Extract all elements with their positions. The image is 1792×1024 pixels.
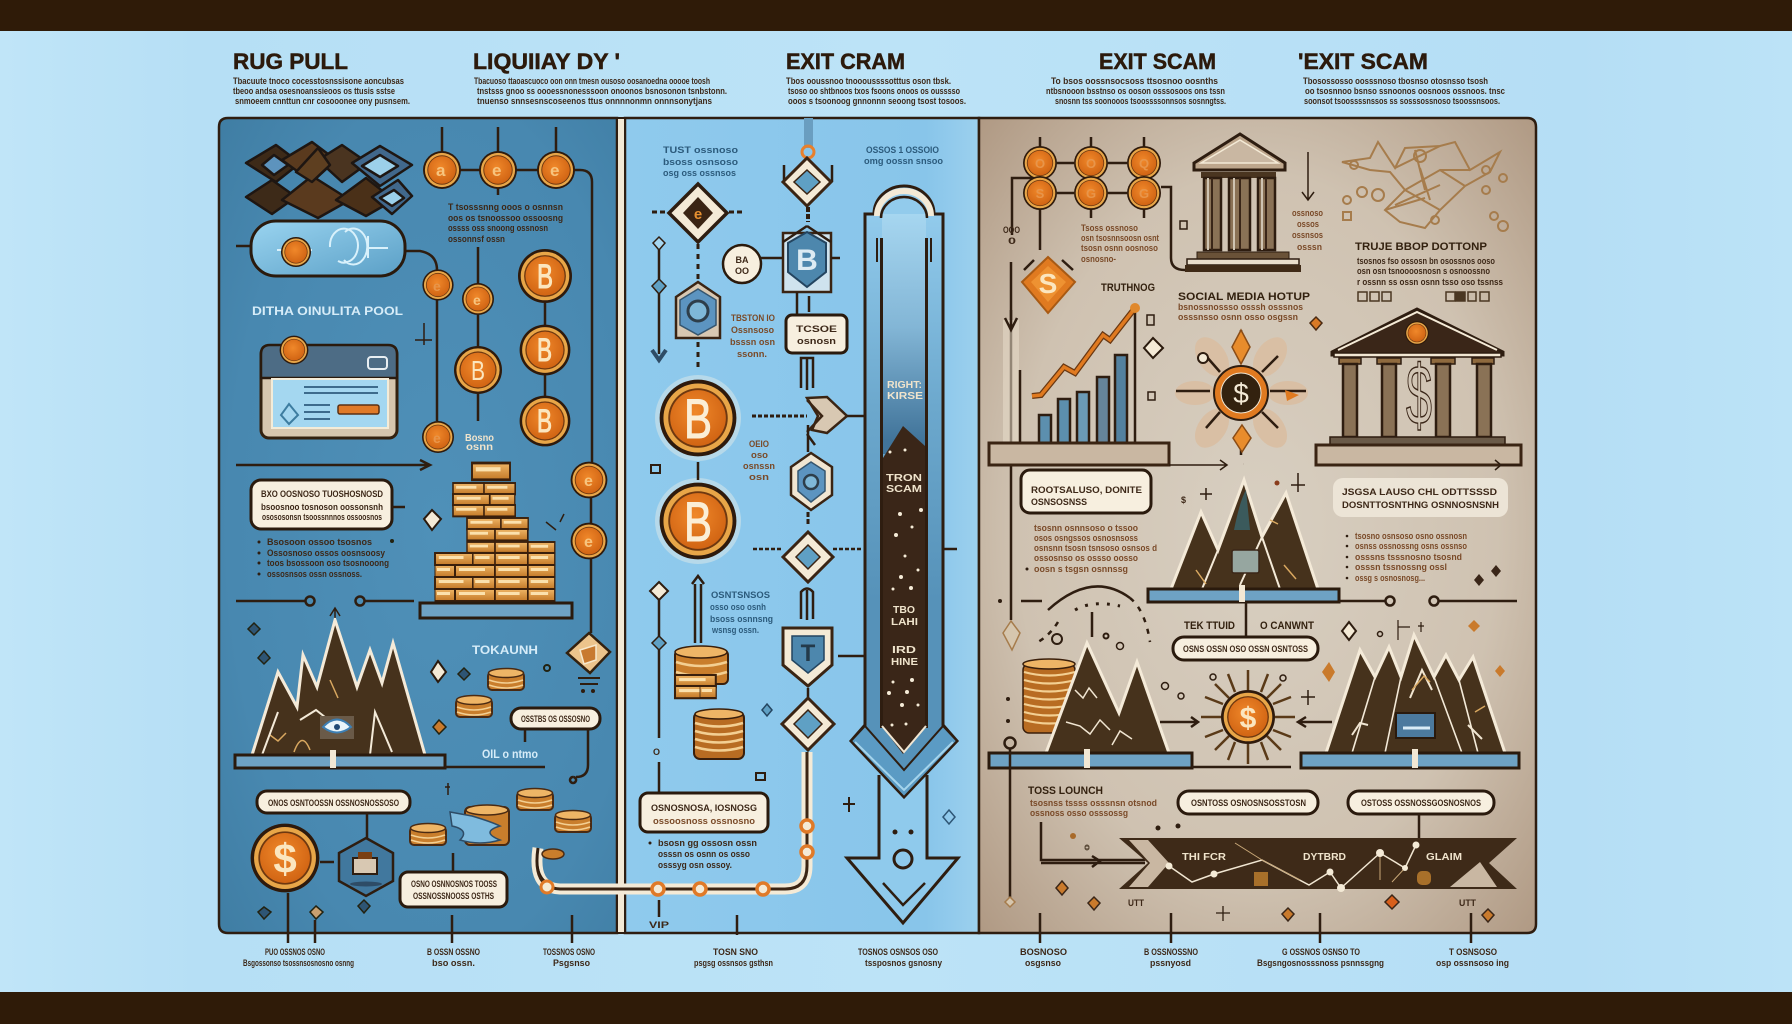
icon: left diamond [652, 184, 745, 242]
callout: right soft box [1333, 478, 1508, 517]
icon: left timeline lower [650, 582, 668, 792]
icon: B shield: B [796, 244, 818, 277]
footer captions: psgsg ossnsos gsthsn [694, 958, 773, 968]
icon: six coins: O [1086, 156, 1096, 171]
small marks [756, 704, 955, 824]
small diamonds [248, 510, 564, 919]
header: exit scam: snosnn tss soonooos tsoossssonnsos sosnngtss. [1055, 96, 1226, 106]
chart: big down arrow: HINE [891, 657, 918, 668]
text block: bullet list [258, 537, 389, 579]
chart: big down arrow [847, 186, 958, 923]
text: center note: bsssn osn [730, 337, 775, 347]
chart: big down arrow: SCAM [886, 484, 922, 495]
footer captions: Bsgossonso tsossnsosnosno osnng [243, 958, 354, 968]
text: temple note: ossnoso [1292, 208, 1323, 218]
icon: temple large [1316, 309, 1521, 465]
top connector [804, 118, 813, 148]
small marks upper [1181, 473, 1305, 505]
icon: left timeline [652, 237, 666, 360]
icon: hexagon 2 [791, 453, 832, 510]
callout: two line note: OSNO OSNNOSNOS TOOSS [411, 879, 497, 889]
header: rug pull: snmoeem cnnttun cnr cosooonee ony pusnsem. [235, 96, 410, 106]
callout: center box [786, 315, 847, 353]
chart: big down arrow: RIGHT: [887, 380, 922, 391]
icon: shield badge [676, 282, 720, 338]
small diamonds lower [1056, 824, 1494, 922]
icon: labeled circle [723, 245, 783, 283]
icon: bitcoin column: B [537, 403, 552, 439]
heading: panel note title: TRUJE BBOP DOTTONP [1355, 241, 1487, 253]
icon: browser window [261, 336, 397, 438]
text: blue note lower: wsnsg ossn. [711, 625, 759, 635]
coin line connections [236, 127, 592, 633]
text block: bullet list: ossosnsos ossn ossnoss. [267, 569, 362, 579]
icon: labeled circle: OO [735, 266, 749, 276]
icon: diamond 3 [753, 532, 863, 582]
text block: top note: oos os tsnoossoo ossoosng [448, 213, 563, 223]
text: small coin caption: Bosno [465, 433, 494, 444]
footer captions: B OSSNOSSNO [1144, 947, 1198, 957]
text: between coins note: osnssn [743, 461, 775, 471]
header: exit scam: ntbsnooon bsstnso os ooson osssosoos ons tssn [1046, 86, 1225, 96]
icon: arrow tag [807, 397, 865, 452]
arrows: base flow [1169, 460, 1521, 470]
text: left tiny label [1003, 225, 1020, 246]
text block: top note: ossss oss snoong ossnosn [448, 223, 548, 233]
connectors: coin and hexagon [320, 813, 367, 862]
text: lower bullets: osssn os osnn os osso [658, 849, 750, 859]
text: right bullets: osssns tsssnosno tsosnd [1355, 552, 1462, 562]
labels: UTT marks: UTT [1128, 898, 1144, 908]
text: top left note: osg oss ossnsos [663, 168, 736, 178]
panel: rug pull background [219, 118, 617, 933]
text: coin note [1081, 223, 1159, 264]
icon: tube [801, 358, 813, 390]
label: token launch: TOSS LOUNCH [1028, 785, 1103, 797]
arrow: up to coin [692, 576, 704, 643]
text: small coin caption [465, 433, 494, 453]
text: blue note lower: bsoss osnnsng [710, 614, 773, 624]
heading: token label: TOKAUNH [472, 643, 538, 657]
callout: right soft box: JSGSA LAUSO CHL ODTTSSSD [1342, 487, 1498, 497]
icon: mountains [235, 608, 445, 768]
icon: left diamond: e [694, 206, 702, 223]
footer captions: TOSNOS OSNSOS OSO [858, 947, 938, 957]
callout: bottom pills: OSTOSS OSSNOSSGOSNOSNOS [1361, 798, 1481, 808]
text: coin note: Tsoss ossnoso [1081, 223, 1138, 233]
arrow: pool to bricks [236, 460, 430, 470]
heading: oil label: OIL o ntmo [482, 747, 538, 761]
callout: long pill [257, 791, 410, 813]
icon: six coins: O [1035, 156, 1045, 171]
icon: six coins: G [1086, 186, 1096, 201]
text block: bullet list: Ossosnoso ossos oosnsoosy [267, 548, 385, 558]
icon: right column coins: e [584, 534, 593, 551]
callout: left cream box: OSNSOSNSS [1031, 497, 1087, 507]
chart: big down arrow: KIRSE [887, 391, 923, 402]
chart: bars and trend [989, 303, 1169, 465]
text: temple note: ossnsos [1292, 230, 1323, 240]
top band [0, 0, 1792, 31]
header: exit cram: tsoso oo shtbnoos txos fsoons onoos os ousssso [788, 86, 960, 96]
header: exit scam two [1298, 49, 1505, 106]
icon: bitcoin column [518, 249, 572, 446]
header: liquidity: tnuenso snnsesnscoseenos ttus onnnnonmn onnnsonytjans [477, 96, 712, 106]
icon: dome and dots [1038, 586, 1150, 650]
text block: top note [448, 202, 563, 244]
text: left bullets: ossosnso os ossso oosso [1034, 553, 1138, 563]
icon: six coins [1023, 146, 1161, 210]
header: exit cram: ooos s tsoonoog gnnonnn seoong tsost tosoos. [788, 96, 966, 106]
timeline connector [236, 596, 414, 606]
text: top left note [663, 145, 739, 178]
text: social media note: SOCIAL MEDIA HOTUP [1178, 291, 1310, 303]
icon: dollar shield: S [1039, 268, 1057, 299]
panel: exit scam contents [989, 134, 1521, 922]
panel: liquidity contents [640, 118, 958, 935]
text: social media note: bsnossnossso osssh osssnos [1178, 302, 1303, 312]
header: liquidity: Tbacuoso ttaoascuoco oon onn tmesn ousoso oosanoedna ooooe toosh [474, 76, 710, 86]
bottom band [0, 992, 1792, 1024]
icon: bitcoin column: B [537, 258, 553, 296]
icon: shattered map [1342, 142, 1508, 231]
text: top right note: OSSOS 1 OSSOIO [866, 145, 939, 155]
icon: dollar shield [1022, 257, 1075, 313]
icon: small coins: e [433, 278, 441, 294]
text: VIP tag: VIP [649, 920, 669, 930]
footer captions: osgsnso [1025, 958, 1061, 968]
text: top right note [864, 145, 944, 166]
icon: tube 2 [801, 588, 813, 620]
icon: top coins: a [436, 161, 446, 180]
header: exit scam two: soonsot tsoossssnssos ss sosssossnoso tsoossnsoos. [1304, 96, 1500, 106]
header: exit scam: To bsos oossnsocsoss ttsosnoo oosnths [1051, 76, 1218, 86]
chart: big down arrow: LAHI [891, 617, 918, 628]
icon: dollar coin: $ [273, 835, 297, 882]
chart: big down arrow: TBO [893, 605, 915, 616]
text: title note: r ossnn ss ossn osnn tsso oso tssnss [1357, 277, 1503, 287]
text: token launch note [1030, 798, 1157, 818]
callout: bottom pills: OSNTOSS OSNOSNSOSSTOSN [1191, 798, 1306, 808]
icon: small square [651, 465, 660, 473]
icon: stack with bricks [675, 646, 728, 698]
text: lower bullets [648, 838, 757, 870]
text: lower bullets: bsosn gg ossosn ossn [658, 838, 757, 848]
icon: diamond 4 [782, 698, 834, 750]
footer captions: TOSSNOS OSNO [543, 947, 595, 957]
icon: six coins: Q [1139, 156, 1149, 171]
header: exit scam two: oo tsosnnoo bsnso ssnoonos oosnoos ossnoos. tnsc [1305, 86, 1505, 96]
callout: long pill: ONOS OSNTOOSSN OSSNOSNOSSOSO [268, 798, 399, 808]
marks around sun [998, 565, 1505, 723]
callout: center pill: OSNS OSSN OSO OSSN OSNTOSS [1183, 644, 1308, 654]
text: top left note: bsoss osnsoso [663, 157, 739, 167]
icon: diamond cart [567, 633, 610, 693]
icon: big bitcoin 2: B [684, 490, 712, 553]
text: right bullets [1346, 531, 1467, 583]
text: left bullets: osnsnn tsosn tsnsoso osnsos d [1034, 543, 1157, 553]
text block: top note: ossonnsf ossn [448, 234, 505, 244]
text: title note: tsosnos fso ossosn bn osossnos ooso [1357, 256, 1495, 266]
callout: rug pull mechanism [251, 480, 405, 529]
text: coin note: tsosn osnn oosnoso [1081, 243, 1158, 253]
arrow: down [1302, 152, 1314, 200]
small marks upper: $ [1181, 495, 1186, 505]
text block: top note: T tsosssnng ooos o osnnsn [448, 202, 563, 212]
header: exit cram: Tbos ooussnoo tnoooussssotttus oson tbsk. [786, 76, 951, 86]
text: left tiny label: OOO [1003, 225, 1020, 235]
text: social media note: osssnsso osnn osso osgssn [1178, 312, 1298, 322]
footer captions: pssnyosd [1150, 958, 1191, 968]
text: left tiny label: 0 [1008, 236, 1016, 246]
callout: left cream box [1021, 470, 1151, 513]
text: top left note: TUST ossnoso [663, 145, 739, 155]
text: blue note lower [710, 590, 773, 635]
icon: small coins: e [473, 292, 481, 308]
icon: gold brick stacks [420, 463, 572, 618]
text block: bullet list: Bsosoon ossoo tsosnos [267, 537, 372, 547]
footer captions: Bsgsngosnosssnoss psnnssgng [1257, 958, 1384, 968]
icon: big bitcoin 1 [655, 375, 741, 461]
text: center note: Ossnsoso [731, 325, 774, 335]
icon: tan small circle [1005, 897, 1015, 907]
icon: tan diamond [1003, 621, 1020, 650]
chart: big down arrow: IRD [892, 645, 916, 656]
text: social media note [1178, 291, 1310, 322]
label row: token launch: O CANWNT [1260, 620, 1314, 632]
icon: top diamond [783, 158, 832, 206]
icon: top coins: e [492, 161, 501, 180]
icon: T shield: T [801, 640, 816, 667]
text: small coin caption: osnn [466, 442, 493, 453]
chart: banner with line: DYTBRD [1303, 852, 1346, 863]
text: center note [730, 313, 775, 359]
labels: UTT marks: UTT [1459, 898, 1476, 908]
chart: banner with line: THI FCR [1182, 852, 1227, 863]
callout: rug pull mechanism: bsoosnoo tosnoson oossonsnh [261, 502, 383, 512]
icon: small coins [422, 269, 502, 453]
icon: diamond block cluster [246, 142, 412, 218]
icon: right column coins: e [584, 473, 593, 490]
footer captions: G OSSNOS OSNSO TO [1282, 947, 1360, 957]
icon: left mountains [989, 643, 1192, 768]
icon: right mountains [1301, 635, 1519, 768]
icon: right column coins [571, 462, 607, 559]
callout: lower box: ossoosnoss ossnosno [653, 816, 756, 826]
icon: big bitcoin 2 [655, 478, 741, 564]
icon: small coins: e [433, 430, 441, 446]
divider line [445, 766, 545, 768]
icon: labeled circle: BA [736, 255, 749, 265]
callout: lower box: OSNOSNOSA, IOSNOSG [651, 803, 757, 813]
text: blue note lower: OSNTSNSOS [711, 590, 770, 600]
header: exit cram: EXIT CRAM [786, 49, 905, 74]
icon: small coin stacks [456, 668, 524, 717]
callout: center pill [1173, 637, 1318, 660]
header: rug pull: RUG PULL [233, 49, 348, 74]
text: left bullets: osos osngssos osnosnsoss [1034, 533, 1138, 543]
text: temple note: osssn [1297, 242, 1322, 252]
label row: token launch: TEK TTUID [1184, 620, 1235, 632]
icon: big bitcoin 1: B [684, 387, 712, 450]
footer captions: BOSNOSO [1020, 947, 1067, 957]
icon: big stack [694, 709, 744, 759]
callout: two line note [400, 872, 507, 907]
connector: left circle [1004, 738, 1016, 898]
icon: hexagon [339, 838, 393, 896]
icon: small coins: B [471, 355, 485, 386]
chart: big down arrow: TRON [886, 473, 922, 484]
text: temple note [1292, 208, 1323, 252]
arrow: left mountain to sun [1160, 717, 1198, 727]
icon: left timeline lower: O [653, 747, 660, 757]
icon: six coins: G [1139, 186, 1149, 201]
frame lines [1011, 137, 1185, 620]
header: exit cram [786, 49, 966, 106]
icon: sunburst dollar: $ [1233, 378, 1249, 409]
text: lower bullets: osssyg osn ossoy. [658, 860, 732, 870]
dotted arrow into tag [752, 414, 807, 418]
panel: rug pull contents [235, 127, 610, 919]
text: center note: TBSTON IO [731, 313, 775, 323]
footer captions [243, 947, 1509, 968]
labels: UTT marks [1128, 898, 1476, 908]
footer captions: bso ossn. [432, 958, 475, 968]
icon: top coins [423, 151, 575, 189]
text: left bullets: tsosnn osnnsoso o tssoo [1034, 523, 1138, 533]
icon: sun coin [1201, 670, 1295, 764]
label: trending: TRUTHNOG [1101, 282, 1155, 294]
text: right bullets: ossg s osnosnosg... [1355, 573, 1425, 583]
panel divider [617, 118, 625, 933]
text: blue note lower: osso oso osnh [710, 602, 766, 612]
icon: sun coin: $ [1240, 702, 1257, 735]
text: top right note: omg oossn snsoo [864, 156, 944, 166]
header: liquidity [473, 49, 727, 106]
header: liquidity: tnstsss gnoo ss oooessnonesssoon onoonos bsnosonon tsnbstonn. [477, 86, 727, 96]
timeline connector right [1021, 596, 1517, 606]
icon: sunburst dollar [1175, 330, 1308, 455]
text: between coins note: OEIO [749, 439, 769, 449]
callout: lower box [640, 793, 768, 832]
header: rug pull: tbeoo andsa osesnoanssieoos os ttusis sstse [233, 86, 395, 96]
text: title note: osn osn tsnoooosnosn s osnoossno [1357, 266, 1490, 276]
footer captions: TOSN SNO [713, 947, 758, 957]
text: token launch note: tsosnss tssss osssnsn otsnod [1030, 798, 1157, 808]
icon: T shield [783, 628, 865, 686]
footer captions: tssposnos gsnosny [865, 958, 942, 968]
icon: temple small [1180, 134, 1301, 272]
panel: liquidity background [625, 118, 979, 933]
header: liquidity: LIQUIIAY DY ' [473, 49, 620, 74]
callout: small pill: OSSTBS OS OSSOSNO [521, 714, 590, 724]
footer captions: T OSNSOSO [1449, 947, 1497, 957]
icon: temple large: $ [1406, 348, 1432, 442]
bottom ticks [288, 893, 1471, 943]
text: between coins note: oso [751, 450, 769, 460]
icon: cross [415, 323, 432, 345]
callout: center box: TCSOE [796, 324, 837, 334]
icon: six coins: S [1036, 186, 1045, 201]
callout: bottom pills [1178, 791, 1494, 814]
text: between coins note: osn [749, 472, 769, 482]
text: center note: ssonn. [737, 349, 767, 359]
callout: center box: osnosn [797, 336, 836, 346]
icon: coin stacks and scarf [410, 788, 591, 845]
text: temple note: ossos [1297, 219, 1319, 229]
heading: pool label: DITHA OINULITA POOL [252, 304, 403, 318]
footer captions: Psgsnso [553, 958, 590, 968]
text: coin note: osnosno- [1081, 254, 1116, 264]
text block: bullet list: toos bsossoon oso tsosnooong [267, 558, 389, 568]
footer captions: osp ossnsoso ing [1436, 958, 1509, 968]
icon: stacked coins [1023, 659, 1075, 733]
chart: banner with line [1119, 838, 1517, 892]
text: title note [1357, 256, 1503, 287]
label row: token launch [1184, 602, 1314, 637]
text: token launch note: ossnoss osso osssossg [1030, 808, 1128, 818]
header: exit scam two: 'EXIT SCAM [1298, 49, 1428, 74]
connector: pill hook [525, 729, 588, 783]
icon: top coins: e [550, 161, 559, 180]
panel: exit scam background [979, 118, 1536, 933]
icons: chart side marks [1144, 315, 1322, 400]
text: between coins note [743, 439, 775, 482]
icon: bitcoin column: B [537, 332, 552, 368]
callout: small pill [511, 708, 600, 729]
footer captions: B OSSN OSSNO [427, 947, 480, 957]
text: left bullets: oosn s tsgsn osnnssg [1034, 564, 1128, 574]
callout: left cream box: ROOTSALUSO, DONITE [1031, 485, 1142, 495]
text: left bullets [1026, 523, 1157, 574]
text: coin note: osn tsosnnsoosn osnt [1081, 233, 1159, 243]
icon: B shield [783, 226, 840, 292]
icon: center mountains [1148, 480, 1339, 602]
callout: two line note: OSSNOSSNOOSS OSTHS [413, 891, 494, 901]
text: right bullets: osnss ossnossng osns ossnso [1355, 541, 1467, 551]
text: right bullets: tsosno osnsoso osno ossnosn [1355, 531, 1467, 541]
arrow: right mountain to sun [1298, 717, 1332, 727]
arrow: note to banner [1041, 822, 1145, 867]
header: rug pull [233, 49, 410, 106]
pipeline: stripes to liquidity panel [537, 752, 813, 895]
icon: pool pill [251, 221, 405, 276]
text: right bullets: osssn tssnossng ossl [1355, 562, 1447, 572]
header: rug pull: Tbacuute tnoco cocesstosnssisone aoncubsas [233, 76, 404, 86]
icons: small squares row [1358, 292, 1489, 301]
chart: banner with line: GLAIM [1426, 852, 1462, 863]
callout: right soft box: DOSNTTOSNTHNG OSNNOSNSNH [1342, 500, 1499, 510]
footer captions: PUO OSSNOS OSNO [265, 947, 325, 957]
callout: rug pull mechanism: osososonsn tsoossnnnos ossoosnos [262, 512, 382, 522]
header: exit scam two: Tbosossosso oosssnoso tbosnso otosnsso tsosh [1303, 76, 1488, 86]
header: exit scam [1046, 49, 1226, 106]
icon: dollar coin [251, 824, 319, 892]
callout: rug pull mechanism: BXO OOSNOSO TUOSHOSNOSD [261, 489, 383, 499]
icon: orange ring [802, 146, 814, 158]
header: exit scam: EXIT SCAM [1099, 49, 1216, 74]
